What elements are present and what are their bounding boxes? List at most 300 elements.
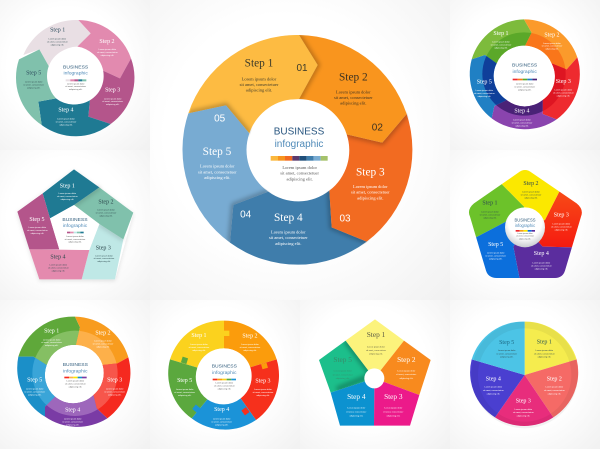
text: step 3: sit amet, consectetuer [553,91,574,94]
text: step 5: sit amet, consectetuer [474,92,495,95]
text: step 2: sit amet, consectetuer [521,194,542,197]
puzzle tab: step 4 [192,404,201,413]
text: step 3: Lorem ipsum dolor [515,408,532,411]
text: step 3: Lorem ipsum dolor [384,406,403,409]
outer rim [475,325,575,425]
colour bar [64,377,87,378]
segment: step 4 [492,100,557,129]
text: step 3: adipiscing elit. [256,394,270,397]
label: step 5: Step 5 [203,146,232,158]
text: step 3: sit amet, consectetuer [94,257,115,260]
label: step 3: Step 3 [105,88,120,94]
label: step 2: Step 2 [98,200,114,206]
text: step 4: adipiscing elit. [215,423,229,426]
number 02: 02 [372,122,383,133]
text: step 1: sit amet, consectetuer [534,352,555,355]
label: step 3: Step 3 [107,377,122,383]
text: step 4: sit amet, consectetuer [531,265,552,268]
text: step 4: sit amet, consectetuer [269,234,308,240]
centre text: adipiscing elit. [69,385,82,388]
puzzle tab: step 3 [241,407,250,415]
text: step 2: adipiscing elit. [524,197,538,200]
text: step 1: adipiscing elit. [192,349,206,352]
text: step 3: adipiscing elit. [517,414,530,417]
text: step 3: sit amet, consectetuer [351,189,390,195]
centre circle [47,48,104,104]
text: step 1: adipiscing elit. [538,356,551,359]
segment: step 4 [470,359,525,417]
segment: step 1 arrow tip [283,35,318,100]
text: step 3: adipiscing elit. [108,393,122,396]
centre text: sit amet, consectetuer [516,235,534,238]
label: step 2: Step 2 [397,355,416,364]
centre heading: BUSINESS [62,217,88,223]
text: step 2: adipiscing elit. [243,349,257,352]
segment: step 3 [495,375,553,426]
segment: step 3 [88,58,134,124]
segment: step 3 [241,359,279,420]
text: step 4: adipiscing elit. [487,392,500,395]
centre text: sit amet, consectetuer [514,85,535,88]
centre circle [496,46,552,102]
text: step 1: Lorem ipsum dolor [49,37,66,40]
centre text: sit amet, consectetuer [65,238,86,241]
text: step 5: adipiscing elit. [204,174,231,179]
text: step 3: adipiscing elit. [557,94,570,97]
label: step 4: Step 4 [514,109,530,115]
text: step 5: Lorem ipsum dolor [200,163,235,168]
centre subheading: infographic [512,69,537,75]
segment: step 4 [29,249,89,279]
text: step 4: Lorem ipsum dolor [347,406,366,409]
text: step 1: adipiscing elit. [45,344,59,347]
text: step 4: sit amet, consectetuer [483,389,504,392]
text: step 5: adipiscing elit. [500,356,514,359]
label: step 5: Step 5 [333,355,352,364]
text: step 3: Lorem ipsum dolor [553,223,570,226]
label: step 4: Step 4 [58,108,74,114]
text: step 2: Lorem ipsum dolor [397,369,416,372]
text: step 2: sit amet, consectetuer [240,346,261,349]
centre text: sit amet, consectetuer [65,85,86,88]
text: step 5: sit amet, consectetuer [485,255,506,258]
text: step 2: sit amet, consectetuer [97,51,118,54]
segment: step 2 [224,321,277,367]
segment: step 4 [331,378,374,426]
text: step 4: sit amet, consectetuer [346,410,367,413]
text: step 5: Lorem ipsum dolor [498,349,516,352]
segment: step 1 [469,184,524,238]
text: step 5: adipiscing elit. [178,394,192,397]
panel: two-tone ring [0,300,150,449]
text: step 2: Lorem ipsum dolor [522,191,540,194]
segment: step 2 [75,317,128,365]
text: step 4: sit amet, consectetuer [512,122,533,125]
text: step 1: adipiscing elit. [51,43,64,46]
segment: step 1 inner [486,32,532,64]
segment: step 3 [538,192,582,248]
text: step 4: sit amet, consectetuer [56,120,77,123]
text: step 2: adipiscing elit. [101,54,114,57]
segment: step 4 inner [496,100,543,116]
centre text: Lorem ipsum dolor [516,82,534,85]
segment: step 3 [93,357,130,418]
label: step 5: Step 5 [499,340,514,346]
text: step 4: adipiscing elit. [515,125,529,128]
label: step 2: Step 2 [547,376,562,382]
text: step 1: sit amet, consectetuer [189,346,210,349]
segment: step 3 inner [542,64,566,112]
label: step 4: Step 4 [214,407,229,413]
text: step 5: Lorem ipsum dolor [476,89,493,92]
segment: step 5 [472,322,525,375]
segment: step 4 [45,395,107,427]
text: step 5: sit amet, consectetuer [198,169,237,175]
centre heading: BUSINESS [512,63,538,69]
colour bar [271,156,328,161]
pentagon shadow [17,169,133,279]
text: step 2: adipiscing elit. [399,376,414,379]
segment: step 4 [192,398,256,430]
centre text: Lorem ipsum dolor [517,233,533,235]
label: step 1: Step 1 [44,328,59,334]
centre text: sit amet, consectetuer [280,170,320,176]
label: step 3: Step 3 [516,399,531,405]
segment: step 1 [43,169,99,218]
text: step 2: sit amet, consectetuer [396,372,417,375]
centre text: sit amet, consectetuer [214,384,235,387]
segment: step 1 [525,322,577,375]
label: step 2: Step 2 [523,181,539,187]
text: step 1: sit amet, consectetuer [47,40,68,43]
segment: step 2 [299,35,407,143]
text: step 4: sit amet, consectetuer [48,266,69,269]
segment: step 4 inner [46,395,98,416]
text: step 3: Lorem ipsum dolor [555,88,572,91]
centre circle [248,99,349,201]
text: step 5: sit amet, consectetuer [23,83,44,86]
label: step 1: Step 1 [493,31,509,37]
label: step 3: Step 3 [96,245,111,251]
label: step 1: Step 1 [537,340,552,346]
text: step 3: sit amet, consectetuer [551,226,572,229]
segment: step 2 [74,187,133,239]
centre text: Lorem ipsum dolor [282,164,317,169]
text: step 4: adipiscing elit. [535,268,548,271]
text: step 1: sit amet, consectetuer [480,214,501,217]
text: step 5: sit amet, consectetuer [496,352,517,355]
centre text: adipiscing elit. [519,237,531,240]
label: step 1: Step 1 [60,183,75,189]
segment: step 5 [17,357,55,417]
centre subheading: infographic [515,223,535,228]
text: step 5: adipiscing elit. [489,258,503,261]
segment: step 1 [472,19,532,63]
text: step 5: Lorem ipsum dolor [26,387,44,390]
number 05: 05 [214,113,226,124]
segment: step 5 [17,193,59,249]
centre text: adipiscing elit. [218,387,231,390]
puzzle tab: step 1 [223,331,229,336]
text: step 5: Lorem ipsum dolor [29,226,46,229]
text: step 4: Lorem ipsum dolor [533,262,550,265]
segment: step 5 [470,55,507,118]
centre subheading: infographic [212,370,237,376]
text: step 1: adipiscing elit. [494,46,508,49]
text: step 4: Lorem ipsum dolor [513,119,531,122]
label: step 4: Step 4 [486,377,501,383]
segment: step 2 inner [525,33,566,69]
label: step 3: Step 3 [356,167,385,179]
centre text: sit amet, consectetuer [65,382,86,385]
centre panel [50,205,99,250]
label: step 4: Step 4 [65,407,80,413]
segment: step 2 [502,170,560,220]
centre heading: BUSINESS [63,362,89,368]
text: step 3: sit amet, consectetuer [513,411,534,414]
centre subheading: infographic [63,71,88,77]
text: step 4: Lorem ipsum dolor [57,117,75,120]
text: step 5: Lorem ipsum dolor [487,252,505,255]
segment: step 3 [329,114,412,242]
text: step 5: Lorem ipsum dolor [25,80,43,83]
label: step 5: Step 5 [477,79,492,85]
centre text: adipiscing elit. [286,176,313,181]
text: step 5: sit amet, consectetuer [333,373,353,376]
panel: chevron ring, rainbow [450,0,600,150]
segment: step 2 [77,20,131,78]
text: step 5: sit amet, consectetuer [27,229,48,232]
text: step 2: Lorem ipsum dolor [241,343,259,346]
text: step 3: Lorem ipsum dolor [104,97,122,100]
label: step 1: Step 1 [245,58,273,70]
text: step 4: sit amet, consectetuer [62,420,83,423]
centre text: Lorem ipsum dolor [67,82,85,85]
text: step 1: sit amet, consectetuer [57,195,78,198]
text: step 3: adipiscing elit. [97,260,111,263]
text: step 4: Lorem ipsum dolor [64,417,82,420]
label: step 3: Step 3 [556,79,571,85]
centre text: Lorem ipsum dolor [67,379,84,382]
panel: folded pentagon, pink and teal [0,150,150,300]
text: step 5: adipiscing elit. [478,95,491,98]
segment: step 3 inner [94,364,118,409]
segment: step 1 [188,35,318,133]
centre circle [47,345,103,402]
colour bar [516,230,535,232]
fold shadows on step 5 [337,341,372,389]
text: step 4: adipiscing elit. [52,269,65,272]
segment: step 4 [230,191,367,265]
centre text: adipiscing elit. [518,88,532,91]
label: step 1: Step 1 [191,333,207,339]
text: step 2: Lorem ipsum dolor [546,386,563,389]
label: step 1: Step 1 [367,330,386,339]
text: step 4: Lorem ipsum dolor [271,229,306,234]
label: step 3: Step 3 [384,392,403,401]
colour bar [66,79,86,81]
label: step 4: Step 4 [274,212,303,224]
text: step 2: sit amet, consectetuer [96,211,117,214]
text: step 5: Lorem ipsum dolor [334,369,352,372]
segment: step 5 [16,49,56,125]
text: step 3: sit amet, consectetuer [104,390,125,393]
centre hole [364,368,384,388]
text: step 2: adipiscing elit. [545,48,559,51]
panel: pentagon with small centre hole [300,300,450,449]
text: step 5: adipiscing elit. [336,376,350,379]
segment: step 3 [374,378,419,426]
text: step 1: adipiscing elit. [369,352,383,355]
text: step 3: sit amet, consectetuer [253,391,274,394]
segment: step 1 [23,20,91,68]
segment: step 5 [182,105,268,243]
text: step 2: sit amet, consectetuer [544,389,565,392]
text: step 2: adipiscing elit. [340,100,367,105]
text: step 5: sit amet, consectetuer [24,390,45,393]
centre heading: BUSINESS [63,65,89,71]
label: step 4: Step 4 [50,254,66,260]
text: step 1: adipiscing elit. [483,217,497,220]
text: step 1: Lorem ipsum dolor [492,41,510,44]
text: step 3: adipiscing elit. [357,195,384,200]
label: step 2: Step 2 [99,39,115,45]
text: step 4: adipiscing elit. [59,123,73,126]
label: step 3: Step 3 [255,379,271,385]
panel: arrow cycle, pink and teal [0,0,150,150]
text: step 4: adipiscing elit. [349,414,364,417]
text: step 2: Lorem ipsum dolor [336,89,371,94]
text: step 4: adipiscing elit. [66,423,80,426]
number 03: 03 [339,213,351,224]
text: step 2: sit amet, consectetuer [334,94,373,100]
colour bar [513,79,537,80]
text: step 3: Lorem ipsum dolor [254,388,272,391]
text: step 2: adipiscing elit. [548,392,561,395]
text: step 3: adipiscing elit. [555,229,568,232]
text: step 2: sit amet, consectetuer [93,343,114,346]
centre circle [196,348,252,404]
rounded pentagon segments [469,170,582,278]
centre subheading: infographic [63,368,88,374]
label: step 5: Step 5 [488,242,503,248]
label: step 4: Step 4 [534,251,549,257]
centre heading: BUSINESS [212,364,238,370]
segment: step 1 [346,319,404,378]
text: step 1: Lorem ipsum dolor [536,349,553,352]
label: step 2: Step 2 [544,33,560,39]
text: step 4: sit amet, consectetuer [211,420,232,423]
centre text: Lorem ipsum dolor [66,235,84,238]
text: step 1: Lorem ipsum dolor [367,345,385,348]
colour bar [213,379,236,380]
label: step 3: Step 3 [554,212,569,218]
segment: step 4 [38,98,111,136]
text: step 1: Lorem ipsum dolor [190,343,208,346]
label: step 2: Step 2 [242,334,258,340]
centre text: adipiscing elit. [69,88,83,91]
centre heading: BUSINESS [514,217,536,222]
segment: step 3 [543,57,580,119]
segment: step 2 inner [76,331,116,365]
text: step 2: adipiscing elit. [96,346,110,349]
number 01: 01 [296,63,308,74]
text: step 2: Lorem ipsum dolor [97,209,115,212]
colour bar [67,232,84,233]
text: step 3: sit amet, consectetuer [102,100,123,103]
text: step 3: adipiscing elit. [386,414,401,417]
text: step 2: Lorem ipsum dolor [99,48,116,51]
label: step 1: Step 1 [50,28,65,34]
text: step 1: Lorem ipsum dolor [43,338,61,341]
text: step 2: Lorem ipsum dolor [94,340,112,343]
panel: main circular infographic [150,0,450,300]
panel: puzzle ring [150,300,300,449]
text: step 4: adipiscing elit. [275,240,302,245]
puzzle tab: step 5 [181,357,188,364]
segment: step 5 [168,359,207,418]
label: step 5: Step 5 [177,378,192,384]
segment: step 2 [374,341,431,395]
segment: step 5 inner [482,56,506,105]
number 04: 04 [240,209,252,220]
label: step 5: Step 5 [26,71,41,77]
text: step 4: Lorem ipsum dolor [213,417,231,420]
text: step 5: Lorem ipsum dolor [176,388,194,391]
segment: step 5 inner [32,358,55,405]
centre subheading: infographic [63,223,88,229]
text: step 5: adipiscing elit. [31,232,44,235]
text: step 3: Lorem ipsum dolor [353,183,388,188]
text: step 2: adipiscing elit. [99,214,113,217]
centre subheading: infographic [275,139,323,150]
text: step 1: adipiscing elit. [61,198,74,201]
text: step 4: Lorem ipsum dolor [485,386,502,389]
text: step 1: sit amet, consectetuer [366,348,386,351]
text: step 1: sit amet, consectetuer [491,43,512,46]
puzzle tab: step 2 [261,363,268,369]
centre text: Lorem ipsum dolor [216,381,233,384]
label: step 1: Step 1 [482,200,498,206]
label: step 2: Step 2 [339,71,368,83]
segment: step 2 [524,19,577,69]
text: step 1: adipiscing elit. [246,87,272,92]
text: step 5: adipiscing elit. [28,393,42,396]
text: step 2: Lorem ipsum dolor [543,42,561,45]
centre text: adipiscing elit. [68,241,82,244]
segment: step 1 [18,317,80,365]
label: step 4: Step 4 [347,392,366,401]
text: step 1: Lorem ipsum dolor [59,192,76,195]
segment: step 2 [525,359,578,417]
centre sphere [505,207,545,247]
segment: step 5 [319,341,374,393]
panel: rounded pentagon, rainbow [450,150,600,300]
text: step 4: Lorem ipsum dolor [50,263,67,266]
segment: step 3 [82,224,123,279]
segment: step 1 [170,321,224,368]
text: step 3: adipiscing elit. [106,103,120,106]
text: step 5: sit amet, consectetuer [174,391,195,394]
segment: step 4 [513,242,572,278]
text: step 1: sit amet, consectetuer [240,81,279,87]
panel: pie chart [450,300,600,449]
text: step 3: Lorem ipsum dolor [106,387,124,390]
label: step 5: Step 5 [27,378,42,384]
text: step 5: adipiscing elit. [27,86,41,89]
text: step 3: Lorem ipsum dolor [95,254,113,257]
label: step 5: Step 5 [29,217,45,223]
